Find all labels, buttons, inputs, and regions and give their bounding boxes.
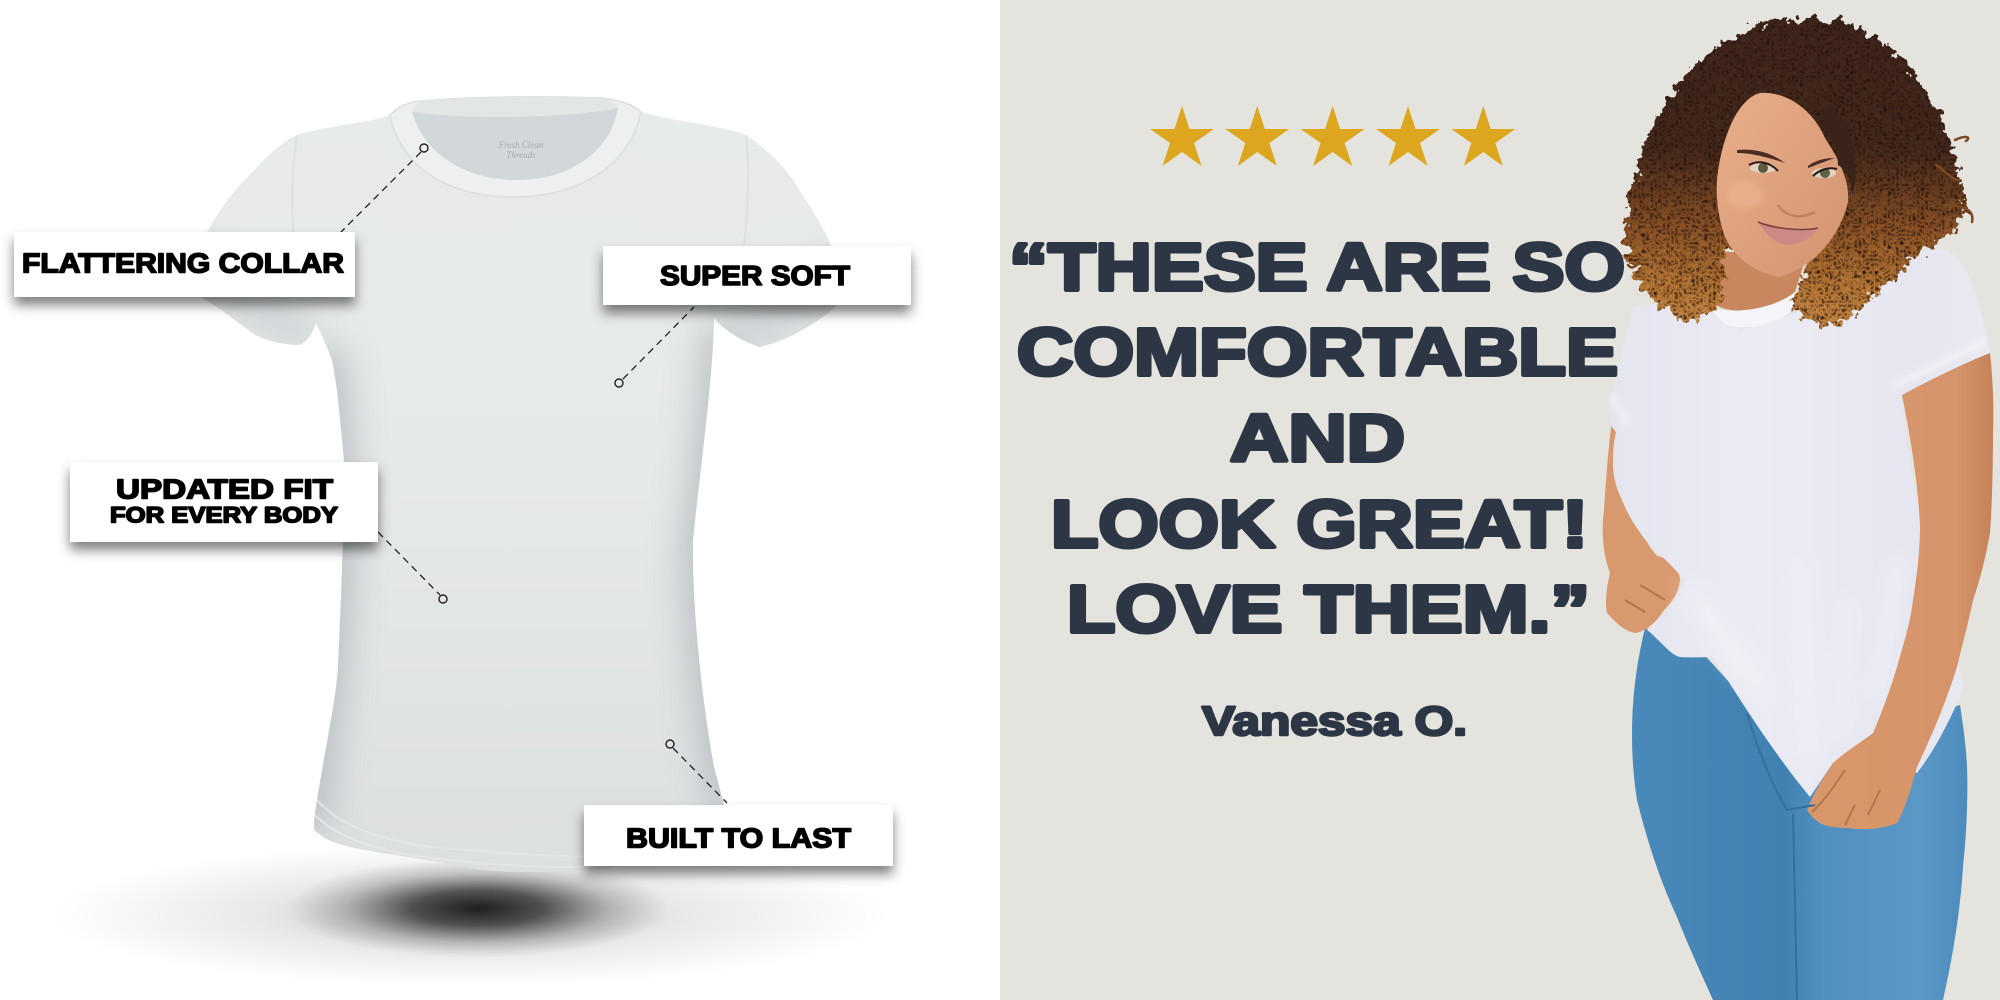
quote text	[1009, 230, 1625, 647]
face	[1717, 93, 1848, 277]
label: flattering collar	[14, 232, 355, 297]
woman in white t-shirt and jeans	[1603, 18, 1993, 1000]
jeans seams	[1747, 713, 1815, 1000]
neck	[1712, 250, 1805, 311]
callout line: built to last	[666, 740, 727, 803]
label: built to last: BUILT TO LAST	[626, 822, 851, 854]
hand fingers detail	[1625, 585, 1880, 825]
quote text: LOOK GREAT!	[1051, 487, 1588, 562]
lips	[1758, 222, 1818, 245]
quote text: “THESE ARE SO	[1009, 230, 1625, 305]
label: flattering collar: FLATTERING COLLAR	[22, 248, 344, 278]
quote text: LOVE THEM.”	[1067, 572, 1590, 647]
callout line: flattering collar	[341, 144, 428, 232]
eyes	[1749, 162, 1837, 178]
label: super soft	[603, 246, 911, 305]
right arm and hand	[1807, 353, 1993, 829]
jeans	[1632, 628, 1967, 1000]
label: updated fit for every body: UPDATED FIT	[116, 474, 333, 504]
callout line: updated fit	[378, 532, 447, 603]
forehead hair lock	[1818, 104, 1856, 195]
label: built to last	[584, 805, 893, 866]
t-shirt: Threads	[506, 150, 536, 160]
cheek highlight	[1727, 181, 1763, 209]
callout line: super soft	[615, 307, 694, 387]
five star rating	[1150, 106, 1515, 166]
floor shadow	[50, 843, 890, 987]
shirt folds	[1680, 560, 1900, 760]
t-shirt worn	[1610, 249, 1990, 797]
neck tag text: Fresh Clean	[498, 140, 544, 150]
eyebrows	[1737, 150, 1785, 163]
label: updated fit for every body	[70, 462, 378, 542]
stray curls	[1626, 137, 1972, 267]
nose	[1778, 205, 1815, 216]
label: updated fit for every body: FOR EVERY BODY	[110, 502, 338, 528]
label: super soft: SUPER SOFT	[660, 260, 850, 291]
shirt collar	[1707, 292, 1796, 327]
reviewer name: Vanessa O.	[1202, 698, 1467, 744]
t-shirt	[190, 90, 850, 880]
panel: testimonial	[1000, 0, 2000, 1000]
left arm and hand	[1603, 420, 1680, 633]
hair back	[1626, 18, 1965, 326]
quote text: COMFORTABLE	[1017, 315, 1618, 390]
panel: product features	[6, 96, 920, 974]
quote text: AND	[1230, 401, 1405, 476]
